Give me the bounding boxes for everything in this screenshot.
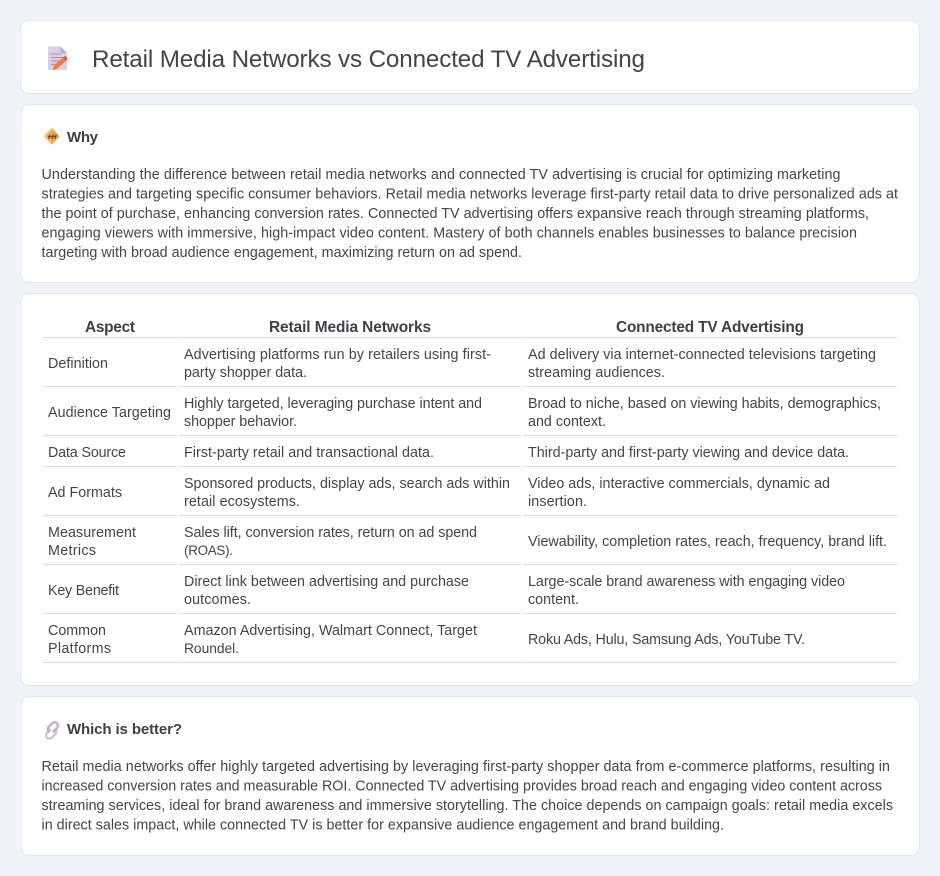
table row: definition: party shopper data. bbox=[184, 365, 307, 381]
text block: why paragraph: the point of purchase, enhancing conversion rates. Connected TV advertising offers expansive reach through streaming platforms, bbox=[42, 206, 869, 222]
table row: key benefit: Direct link between advertising and purchase bbox=[184, 574, 469, 590]
table row: ad formats: Video ads, interactive commercials, dynamic ad bbox=[528, 476, 830, 492]
heading: why: Why bbox=[67, 129, 99, 146]
text block: which is better paragraph: in direct sales impact, while connected TV is better for expansive audience engagement and brand building. bbox=[42, 818, 724, 834]
table row: common platforms: Roku Ads, Hulu, Samsung Ads, YouTube TV. bbox=[528, 632, 805, 648]
table row: definition bbox=[48, 347, 876, 381]
table row: data source bbox=[48, 445, 849, 461]
table row: audience targeting: Highly targeted, leveraging purchase intent and bbox=[184, 396, 482, 412]
table row: audience targeting: Broad to niche, based on viewing habits, demographics, bbox=[528, 396, 881, 412]
table row: data source: Data Source bbox=[48, 445, 126, 461]
table header row: Retail Media Networks bbox=[269, 319, 431, 336]
heading: which is better: Which is better? bbox=[67, 721, 182, 738]
text block: which is better paragraph bbox=[42, 759, 893, 834]
panel: which is better bbox=[20, 696, 920, 856]
table row: key benefit: content. bbox=[528, 592, 579, 608]
table row: data source: First-party retail and transactional data. bbox=[184, 445, 434, 461]
table row: definition: Definition bbox=[48, 356, 108, 372]
text block: why paragraph bbox=[42, 167, 898, 261]
table row: audience targeting: and context. bbox=[528, 414, 606, 430]
table row: key benefit: outcomes. bbox=[184, 592, 251, 608]
table row: data source: Third-party and first-party viewing and device data. bbox=[528, 445, 849, 461]
text block: why paragraph: engaging viewers with immersive, high-impact video content. Mastery of both channels enables businesses to balance precision bbox=[42, 226, 857, 242]
table row: audience targeting: shopper behavior. bbox=[184, 414, 297, 430]
table row: audience targeting bbox=[48, 396, 881, 430]
table row: ad formats: Sponsored products, display ads, search ads within bbox=[184, 476, 510, 492]
table row: common platforms bbox=[48, 623, 805, 657]
table row: definition: streaming audiences. bbox=[528, 365, 665, 381]
table row: measurement metrics: Measurement bbox=[48, 525, 136, 541]
table row: definition: Advertising platforms run by retailers using first- bbox=[184, 347, 491, 363]
text block: why paragraph: targeting with broad audience engagement, maximizing return on ad spend. bbox=[42, 245, 522, 261]
panel: title header bbox=[20, 20, 920, 94]
icon: orange diamond warning bbox=[44, 128, 60, 145]
text block: which is better paragraph: streaming services, ideal for brand awareness and immersive storytelling. The choice depends on campaign goals: retail media excels bbox=[42, 798, 893, 814]
table row: ad formats: Ad Formats bbox=[48, 485, 122, 501]
table row: definition: Ad delivery via internet-connected televisions targeting bbox=[528, 347, 876, 363]
text block: why paragraph: Understanding the difference between retail media networks and connected TV advertising is crucial for optimizing marketing bbox=[42, 167, 841, 183]
table row: audience targeting: Audience Targeting bbox=[48, 405, 171, 421]
table header row: Aspect bbox=[85, 319, 135, 336]
title: Retail Media Networks vs Connected TV Advertising bbox=[92, 46, 645, 73]
table row: key benefit: Key Benefit bbox=[48, 583, 119, 599]
table header row: Connected TV Advertising bbox=[616, 319, 804, 336]
table row: common platforms: Common bbox=[48, 623, 106, 639]
table row: measurement metrics: Metrics bbox=[48, 543, 96, 559]
table row: measurement metrics: (ROAS). bbox=[184, 543, 233, 558]
table row: measurement metrics: Viewability, completion rates, reach, frequency, brand lift. bbox=[528, 534, 887, 550]
panel: why bbox=[20, 104, 920, 282]
icon: memo with pencil bbox=[48, 46, 68, 70]
table row: common platforms: Roundel. bbox=[184, 641, 239, 656]
table row: common platforms: Amazon Advertising, Walmart Connect, Target bbox=[184, 623, 477, 639]
table row: ad formats: retail ecosystems. bbox=[184, 494, 300, 510]
text block: why paragraph: strategies and targeting specific consumer behaviors. Retail media networks leverage first-party retail data to drive personalized ads at bbox=[42, 186, 898, 202]
panel: comparison table bbox=[20, 294, 920, 686]
table row: common platforms: Platforms bbox=[48, 641, 111, 657]
table row: measurement metrics bbox=[48, 525, 887, 559]
text block: which is better paragraph: Retail media networks offer highly targeted advertising by leveraging first-party shopper data from e-commerce platforms, resulting in bbox=[42, 759, 890, 775]
table row: key benefit: Large-scale brand awareness with engaging video bbox=[528, 574, 845, 590]
table row: measurement metrics: Sales lift, conversion rates, return on ad spend bbox=[184, 525, 477, 541]
table row: key benefit bbox=[48, 574, 845, 608]
table row: ad formats: insertion. bbox=[528, 494, 587, 510]
text block: which is better paragraph: increased conversion rates and measurable ROI. Connected TV advertising provides broad reach and engaging video content across bbox=[42, 778, 882, 794]
icon: chain link bbox=[46, 722, 58, 739]
table row: ad formats bbox=[48, 476, 830, 510]
table header row bbox=[85, 319, 804, 336]
